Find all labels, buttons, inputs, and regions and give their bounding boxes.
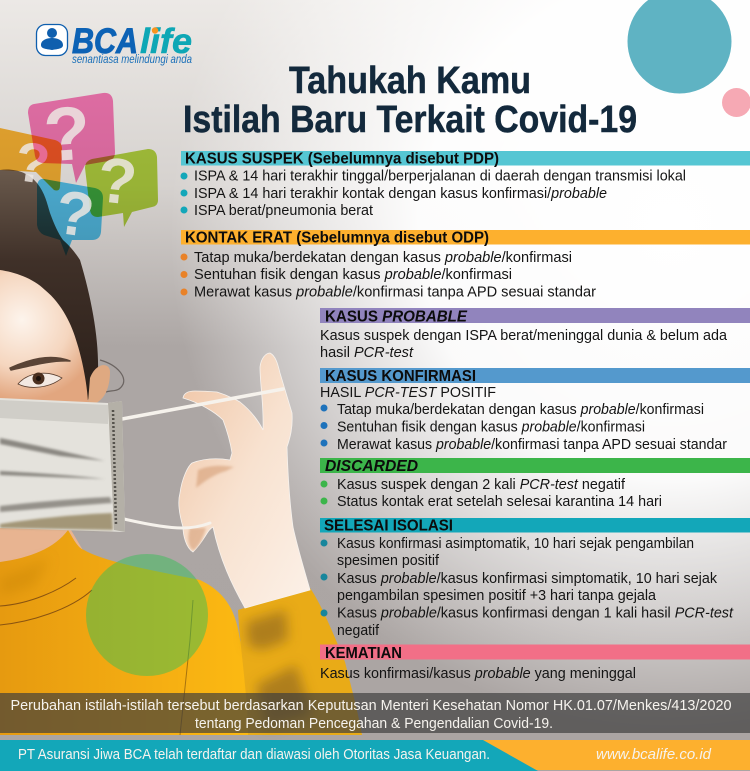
pink bubble: ? [41, 90, 93, 179]
subheading: HASIL PCR-TEST POSITIF [320, 385, 496, 401]
hand [179, 353, 310, 608]
bullet list: Sentuhan fisik dengan kasus probable/konfirmasi [194, 267, 512, 283]
title [183, 60, 637, 141]
panel: kasus suspek [180, 150, 750, 219]
orange bubble: ? [11, 129, 54, 196]
ear [88, 365, 110, 403]
header bar [320, 368, 750, 383]
speech bubbles with question marks [0, 90, 158, 256]
panel: discarded [320, 458, 750, 510]
bullet list [180, 250, 596, 300]
footer orange panel [0, 740, 750, 770]
heading: KASUS KONFIRMASI [325, 368, 476, 385]
panel: kasus probable [320, 308, 750, 361]
bullet list: Status kontak erat setelah selesai karantina 14 hari [337, 494, 662, 510]
bullet list: ISPA & 14 hari terakhir tinggal/berperjalanan di daerah dengan transmisi lokal [194, 168, 686, 184]
header bar [320, 308, 750, 323]
decorative pink circle [722, 88, 750, 117]
bullet list: Kasus suspek dengan 2 kali PCR-test negatif [337, 477, 626, 493]
bullet list: negatif [337, 623, 380, 639]
note text: tentang Pedoman Pencegahan & Pengendalian Covid-19. [195, 715, 553, 732]
neck [0, 525, 84, 570]
heading: KEMATIAN [325, 645, 402, 662]
note band [0, 693, 750, 733]
bullet list: Sentuhan fisik dengan kasus probable/konfirmasi [337, 420, 645, 436]
note text: Perubahan istilah-istilah tersebut berdasarkan Keputusan Menteri Kesehatan Nomor HK.01.07/Menkes/413/2020 [10, 697, 732, 714]
website: www.bcalife.co.id [596, 746, 712, 763]
face [0, 270, 112, 420]
heading: SELESAI ISOLASI [324, 518, 453, 534]
header bar [181, 151, 750, 166]
face mask [0, 398, 125, 532]
header bar [181, 230, 750, 244]
bullet list: ISPA & 14 hari terakhir kontak dengan kasus konfirmasi/probable [194, 186, 607, 202]
bullet list [320, 402, 727, 453]
header bar [320, 458, 750, 473]
title: Tahukah Kamu [289, 60, 531, 102]
heading: DISCARDED [325, 458, 418, 475]
blue bubble: ? [51, 178, 98, 251]
heading: KONTAK ERAT (Sebelumnya disebut ODP) [185, 230, 489, 246]
bullet list: Merawat kasus probable/konfirmasi tanpa APD sesuai standar [194, 284, 596, 300]
logo wordmark life: life [140, 22, 192, 61]
sleeve [238, 588, 362, 735]
heading: KASUS PROBABLE [325, 308, 468, 326]
green bubble: ? [94, 143, 140, 219]
logo wordmark BCA: BCA [72, 22, 138, 61]
bullet list: Merawat kasus probable/konfirmasi tanpa APD sesuai standar [337, 437, 727, 453]
finger shadows [188, 466, 234, 550]
orange bubble [0, 128, 62, 196]
logo emblem [36, 24, 68, 56]
bullet list: pengambilan spesimen positif +3 hari tanpa gejala [337, 588, 657, 604]
photo: woman holding a face mask [0, 170, 362, 735]
panel: kasus konfirmasi [320, 368, 750, 453]
panel: selesai isolasi [320, 518, 750, 639]
tagline: senantiasa melindungi anda [72, 52, 192, 66]
header bar [320, 518, 750, 532]
panel: kematian [320, 644, 750, 682]
logo dot [152, 27, 158, 34]
disclaimer: PT Asuransi Jiwa BCA telah terdaftar dan diawasi oleh Otoritas Jasa Keuangan. [18, 746, 490, 763]
hair strand near ear [100, 360, 124, 392]
sweater [0, 530, 362, 735]
heading: KASUS SUSPEK (Sebelumnya disebut PDP) [185, 150, 499, 168]
body text: Kasus konfirmasi/kasus probable yang meninggal [320, 666, 636, 682]
bullet list [180, 168, 686, 219]
logo: BCA life [36, 22, 192, 66]
bullet list: spesimen positif [337, 553, 440, 569]
body text: Kasus suspek dengan ISPA berat/meninggal dunia & belum ada [320, 328, 728, 344]
bullet list [320, 477, 662, 510]
footer teal panel [0, 740, 538, 771]
bullet list: Tatap muka/berdekatan dengan kasus probable/konfirmasi [337, 402, 704, 418]
decorative teal circle [628, 0, 732, 94]
green translucent circle [86, 554, 208, 676]
eyebrow [10, 357, 70, 370]
title: Istilah Baru Terkait Covid-19 [183, 99, 637, 141]
bullet list [320, 536, 734, 639]
bullet list: Kasus probable/kasus konfirmasi dengan 1 kali hasil PCR-test [337, 606, 734, 622]
bullet list: Tatap muka/berdekatan dengan kasus probable/konfirmasi [194, 250, 572, 266]
body text: hasil PCR-test [320, 345, 414, 361]
green bubble [85, 143, 158, 227]
bullet list: ISPA berat/pneumonia berat [194, 203, 373, 219]
pink bubble [28, 90, 115, 183]
footer [0, 740, 750, 771]
blue bubble [37, 178, 103, 256]
bullet list: Kasus konfirmasi asimptomatik, 10 hari sejak pengambilan [337, 536, 694, 552]
bullet list: Kasus probable/kasus konfirmasi simptomatik, 10 hari sejak [337, 571, 718, 587]
header bar [320, 644, 750, 660]
hair [0, 170, 98, 400]
panel: kontak erat [180, 230, 750, 300]
eye [18, 372, 62, 387]
mask ear loops [122, 389, 283, 528]
body text [320, 328, 728, 361]
note text [10, 697, 732, 732]
